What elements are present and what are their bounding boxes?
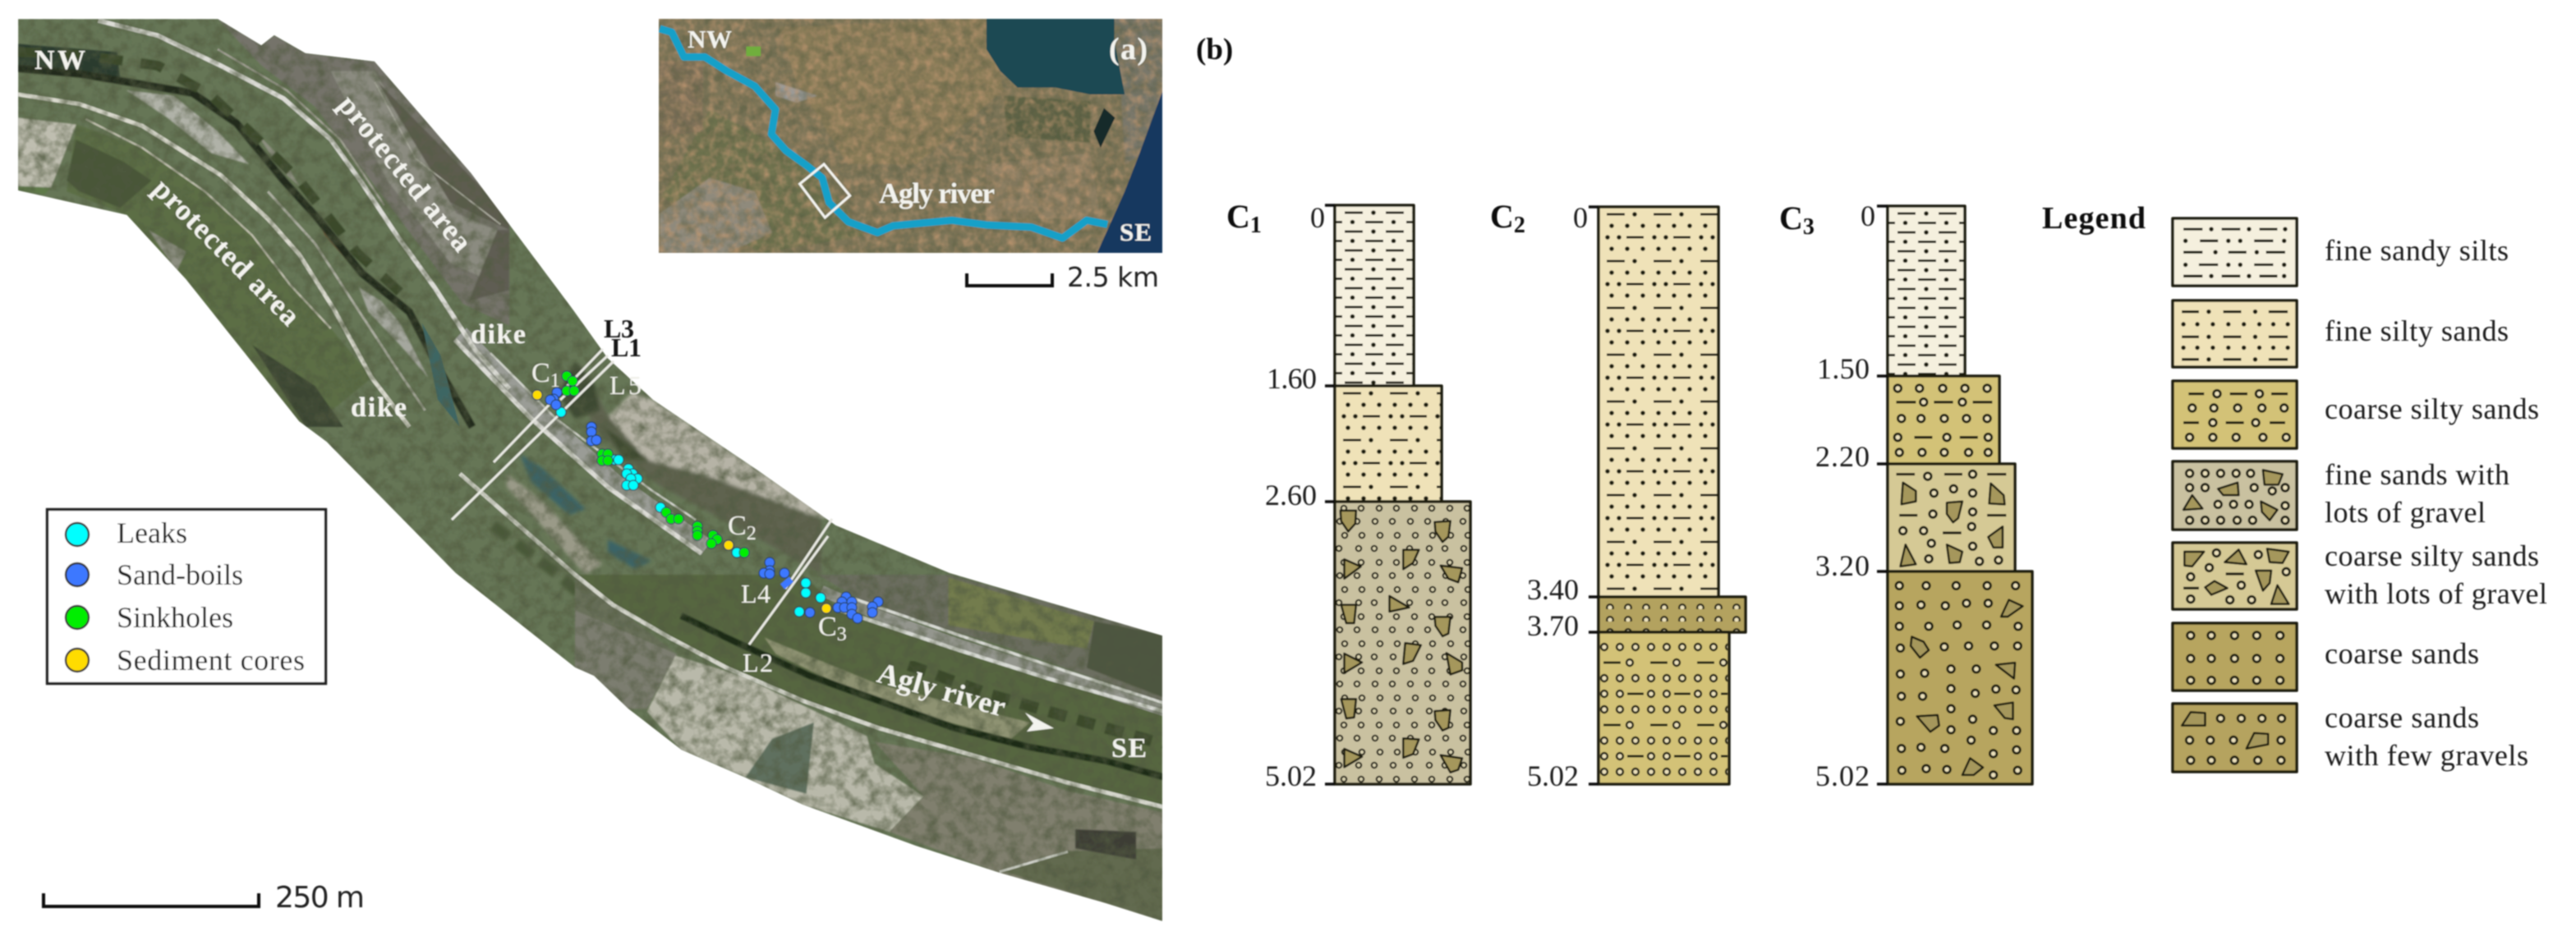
C1 layer: fine sands with lots of gravel [1335, 502, 1470, 784]
map scale bar: 250 m [275, 881, 365, 915]
inset labels: NW [688, 25, 732, 53]
C3 depth ticks and values: 0 [1861, 200, 1875, 232]
C2 depth ticks and values: 5.02 [1527, 759, 1579, 792]
arrow: river flow direction [1025, 713, 1054, 732]
legend item: fine sandy silts: fine sandy silts [2325, 234, 2509, 267]
map labels: 1 [550, 370, 560, 392]
inset labels: SE [1120, 218, 1152, 246]
panel label (b): (b) [1196, 33, 1233, 67]
C3 layer: fine sandy silts [1888, 206, 1965, 376]
legend heading: Legend [2042, 201, 2146, 236]
core log C2: 2 [1514, 213, 1525, 238]
legend item: coarse sands with few gravels: coarse sands [2325, 701, 2479, 734]
map labels: C [531, 358, 550, 388]
map legend: Sand-boils [117, 558, 243, 591]
C3 depth ticks and values: 3.20 [1815, 549, 1870, 582]
core log C3: 3 [1803, 214, 1815, 240]
legend item: fine sandy silts [2173, 218, 2509, 286]
legend item: coarse sands with few gravels: with few gravels [2325, 739, 2528, 772]
C1 depth ticks and values [1265, 201, 1335, 792]
C3 layer: coarse silty sands with lots of gravel [1888, 464, 2015, 571]
C3 depth ticks and values: 1.50 [1817, 352, 1870, 385]
C1 depth ticks and values: 2.60 [1265, 479, 1317, 512]
C3 depth ticks and values [1815, 200, 1888, 792]
core log C1: C [1226, 198, 1250, 235]
C3 depth ticks and values: 5.02 [1815, 759, 1870, 792]
C2 layer: fine silty sands [1598, 207, 1718, 597]
core log C2: C [1490, 198, 1514, 235]
map labels: 3 [837, 624, 847, 645]
C3 layer: coarse silty sands [1888, 376, 1999, 464]
inset labels [688, 25, 1152, 246]
legend item: coarse sands [2173, 623, 2479, 691]
map legend: Sinkholes [117, 601, 233, 634]
map labels: C [728, 511, 747, 541]
C2 depth ticks and values [1527, 201, 1598, 792]
core log C3 [1779, 200, 2032, 792]
C2 depth ticks and values: 3.70 [1527, 609, 1579, 642]
survey lines L1 to L5 [452, 349, 832, 645]
map labels: 2 [747, 523, 757, 544]
C1 depth ticks and values: 1.60 [1267, 362, 1317, 395]
map labels: L2 [743, 648, 773, 677]
core log C2 [1490, 198, 1746, 792]
map labels: SE [1111, 733, 1147, 764]
legend item: coarse silty sands: coarse silty sands [2325, 392, 2539, 425]
C1 depth ticks and values: 5.02 [1265, 759, 1317, 792]
C1 layer: fine sandy silts [1335, 205, 1414, 386]
inset scale bar [967, 261, 1159, 293]
panel: lithology legend [2042, 201, 2547, 772]
C2 layer: coarse silty sands [1598, 632, 1729, 784]
satellite image [659, 19, 1163, 253]
map legend [48, 509, 325, 683]
map labels: L3 [604, 314, 634, 343]
legend item: coarse silty sands [2173, 381, 2539, 448]
C3 layer: coarse sands with few gravels [1888, 571, 2032, 784]
panel: inset satellite map (a) [659, 19, 1163, 293]
map labels: C [818, 612, 837, 642]
core log C3: C [1779, 200, 1803, 236]
panel: aerial map of the Agly river dike [0, 0, 1175, 928]
map labels: protected area [146, 172, 307, 333]
legend item: coarse silty sands with lots of gravel [2173, 539, 2547, 610]
C2 layer: coarse sands band [1598, 597, 1746, 632]
legend item: coarse sands with few gravels [2173, 701, 2528, 772]
map labels [34, 45, 1147, 764]
core log C1 [1226, 198, 1470, 792]
aerial photo background [0, 0, 1175, 928]
legend item: coarse sands: coarse sands [2325, 637, 2479, 670]
C2 depth ticks and values: 3.40 [1527, 573, 1579, 606]
map legend: Sediment cores [117, 644, 305, 677]
map scale bar [44, 881, 365, 915]
legend item: fine sands with lots of gravel: fine sands with [2325, 458, 2509, 491]
legend item: fine silty sands [2173, 301, 2509, 367]
C3 depth ticks and values: 2.20 [1815, 440, 1870, 473]
legend item: coarse silty sands with lots of gravel: coarse silty sands [2325, 539, 2539, 572]
map labels: protected area [332, 89, 479, 258]
C1 depth ticks and values: 0 [1310, 201, 1325, 234]
legend item: coarse silty sands with lots of gravel: with lots of gravel [2325, 577, 2547, 610]
survey markers: leaks, sand-boils, sinkholes, cores [532, 371, 883, 623]
legend item: fine sands with lots of gravel: lots of gravel [2325, 496, 2486, 529]
map legend: Leaks [117, 516, 187, 549]
map labels: L1 [611, 333, 642, 362]
map labels: NW [34, 45, 85, 76]
legend item: fine silty sands: fine silty sands [2325, 314, 2509, 347]
C1 layer: fine silty sands [1335, 386, 1442, 502]
legend item: fine sands with lots of gravel [2173, 458, 2509, 530]
inset scale bar: 2.5 km [1067, 261, 1159, 293]
inset labels: (a) [1109, 32, 1148, 67]
map labels: L4 [741, 579, 770, 608]
map labels: L5 [610, 370, 642, 400]
inset labels: Agly river [879, 177, 995, 209]
map labels: dike [351, 392, 407, 423]
map labels: dike [471, 319, 526, 350]
core log C1: 1 [1250, 213, 1262, 238]
C2 depth ticks and values: 0 [1573, 201, 1588, 234]
map labels: Agly river [874, 656, 1010, 723]
